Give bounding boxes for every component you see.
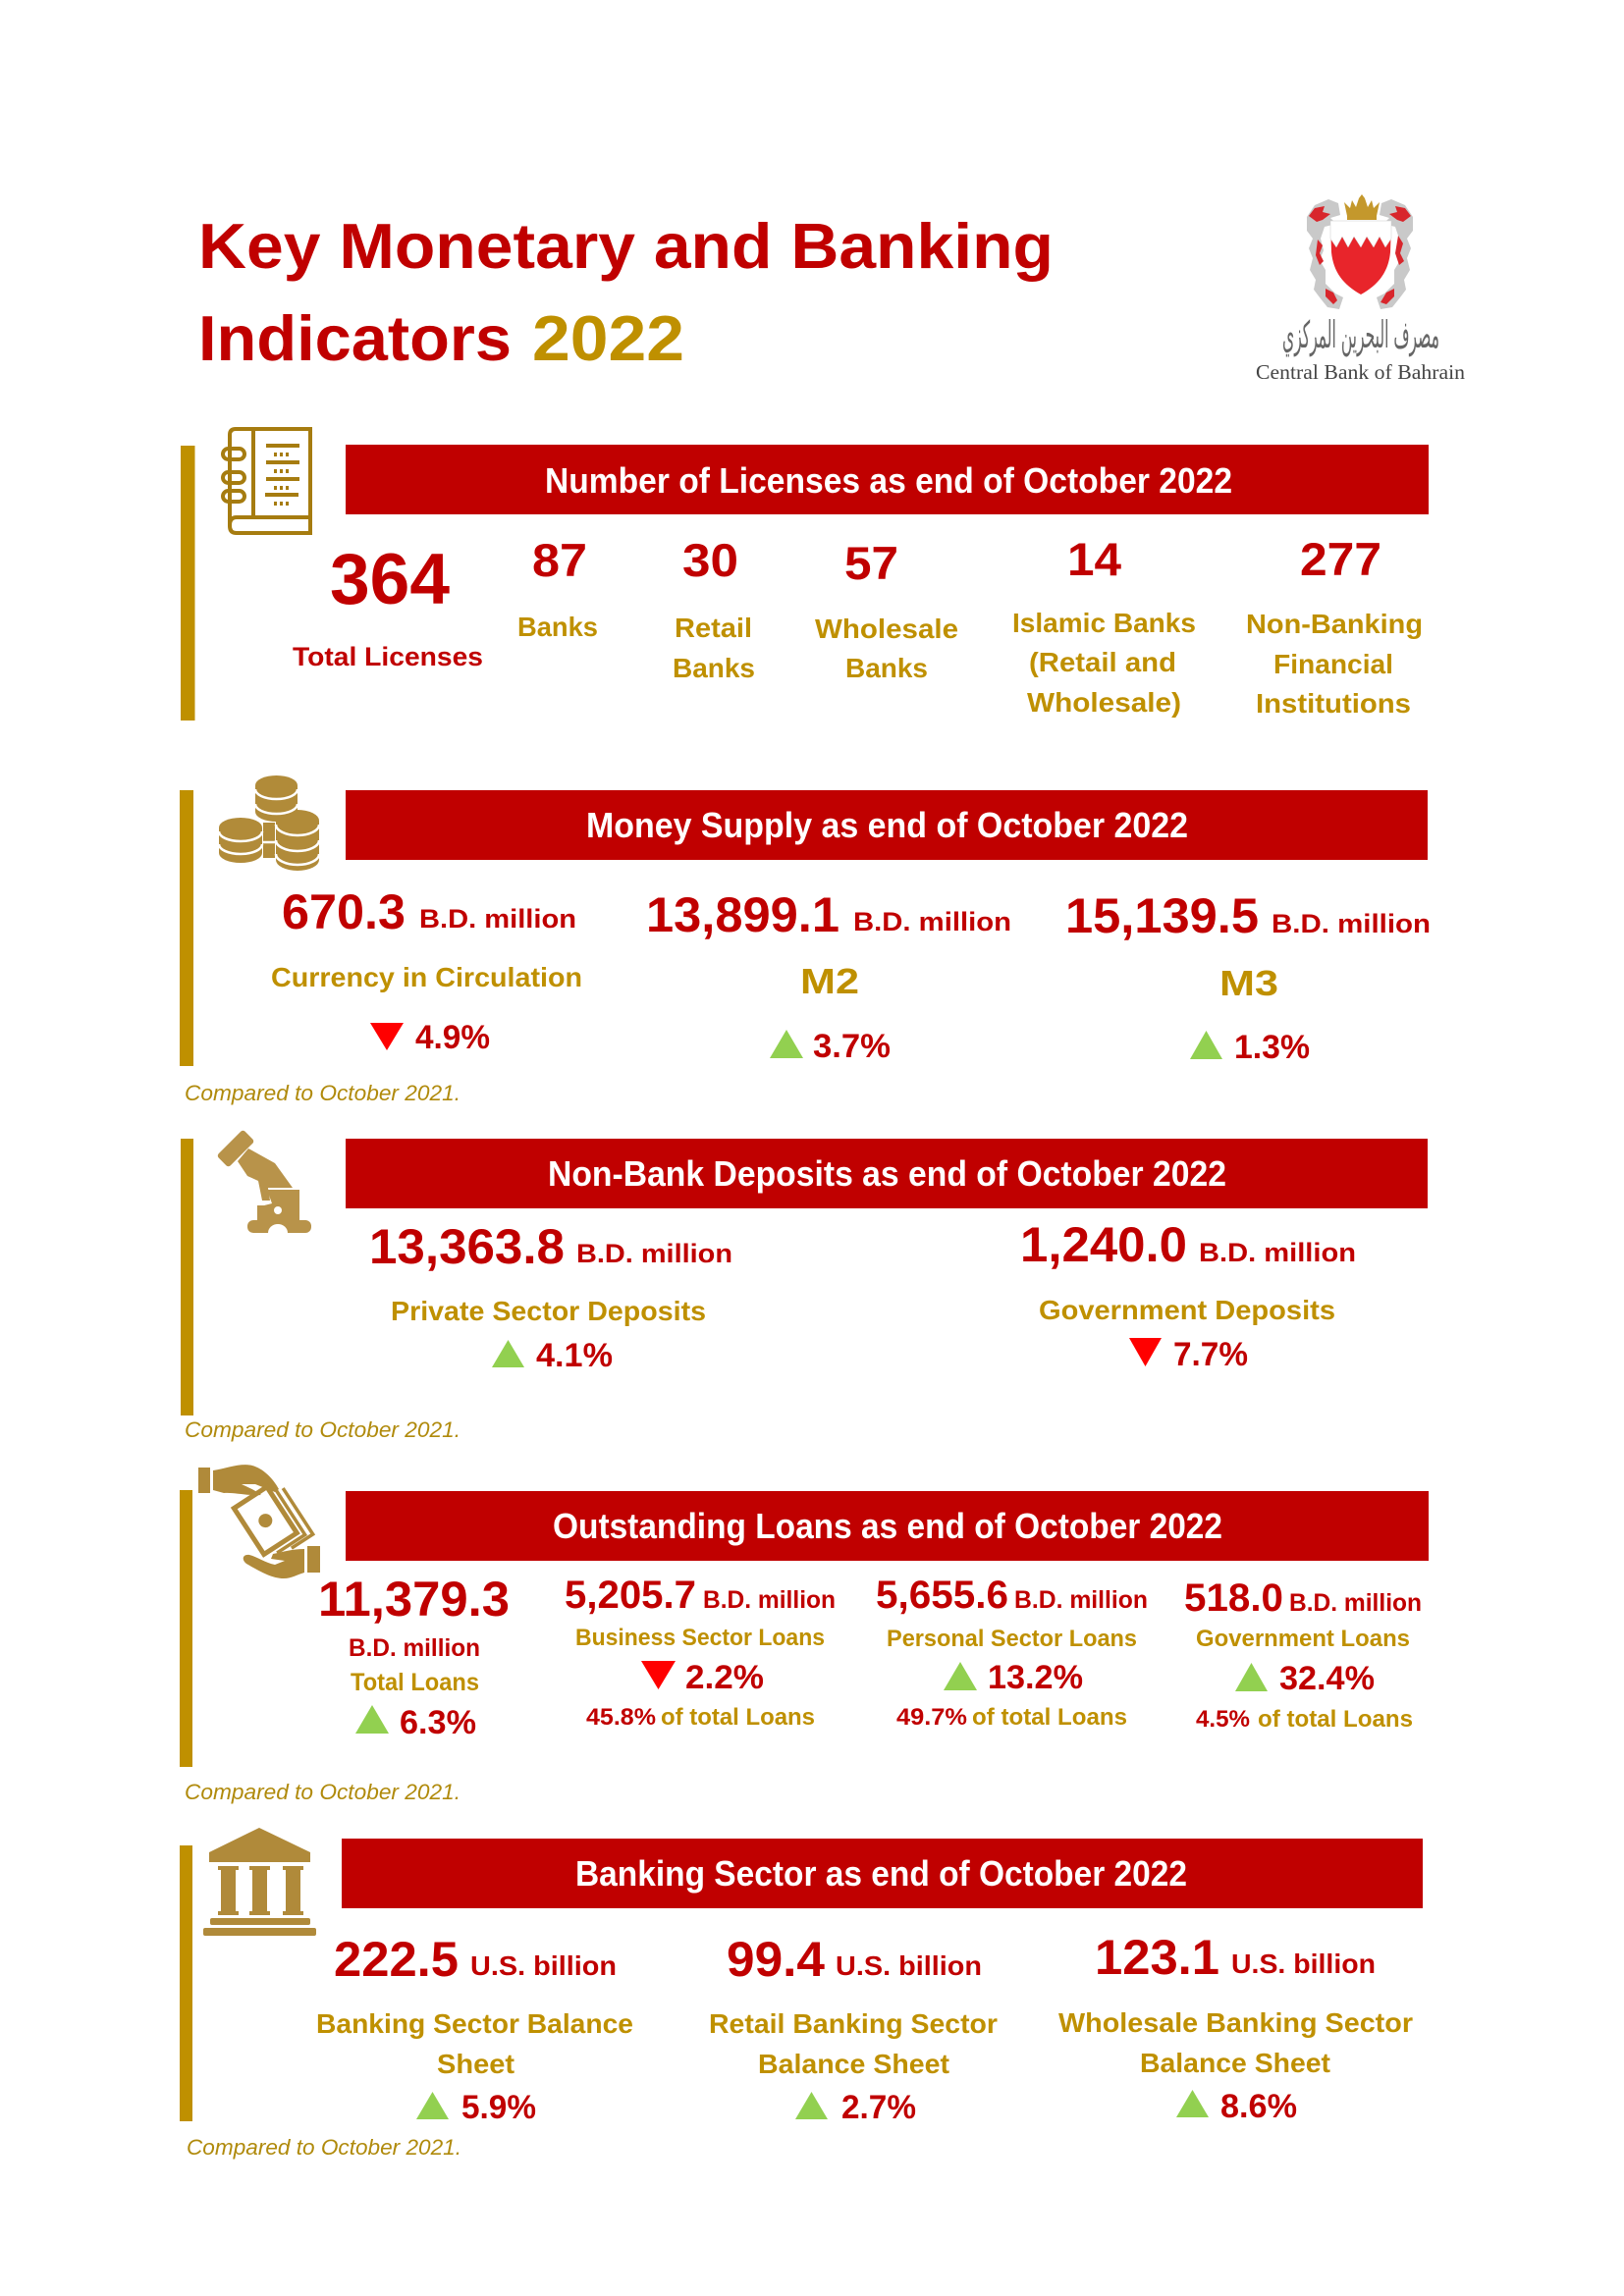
stat: total loans: B.D. million	[349, 1634, 480, 1662]
stat: government deposits: B.D. million	[1199, 1238, 1356, 1267]
title: Key Monetary and Banking	[198, 210, 1054, 282]
stat: islamic banks: (Retail and	[1029, 647, 1176, 677]
stat: private sector deposits: 13,363.8	[369, 1219, 565, 1274]
stat: business sector loans: B.D. million	[703, 1586, 836, 1614]
stat: business sector loans: 2.2%	[685, 1659, 764, 1696]
panel: outstanding loans	[180, 1465, 1429, 1804]
heading	[346, 1491, 1429, 1561]
panel: non-bank deposits	[181, 1130, 1428, 1442]
stat: M2: M2	[800, 961, 859, 1001]
stat: total licenses: Total Licenses	[293, 642, 483, 671]
stat: government loans: B.D. million	[1289, 1589, 1422, 1617]
stat: M3	[1065, 888, 1431, 1066]
accent bar	[181, 1139, 193, 1415]
stat: banks	[517, 534, 598, 642]
stat: total loans	[318, 1572, 510, 1741]
heading: Money Supply as end of October 2022	[586, 805, 1188, 845]
logo: Central Bank of Bahrain	[1256, 194, 1466, 384]
title: Indicators	[198, 302, 512, 374]
stat: total loans: 11,379.3	[318, 1572, 510, 1627]
stat: government loans	[1184, 1576, 1422, 1733]
stat: banking sector balance sheet: U.S. billion	[470, 1950, 617, 1981]
stat: personal sector loans	[876, 1574, 1148, 1731]
stat: non-banking institutions: Financial	[1273, 649, 1393, 679]
heading	[346, 1139, 1428, 1208]
stat: business sector loans: Business Sector Loans	[575, 1625, 825, 1651]
stat: retail banking sector balance sheet: U.S. billion	[836, 1950, 982, 1981]
panel: banking sector	[180, 1828, 1423, 2160]
stat: government loans: 32.4%	[1279, 1660, 1375, 1697]
icon: crown	[1344, 194, 1380, 220]
stat: government loans: of total Loans	[1258, 1706, 1413, 1733]
stat: government loans: Government Loans	[1196, 1626, 1410, 1652]
logo caption: Central Bank of Bahrain	[1256, 360, 1466, 384]
stat: wholesale banking sector balance sheet: Balance Sheet	[1140, 2048, 1330, 2078]
stat: retail banking sector balance sheet: 99.4	[727, 1932, 825, 1987]
stat: government deposits	[1020, 1217, 1356, 1373]
stat: currency in circulation: 4.9%	[415, 1019, 490, 1056]
stat: M2: B.D. million	[853, 907, 1011, 936]
stat: banking sector balance sheet	[316, 1932, 633, 2126]
title	[198, 210, 1054, 374]
heading: Non-Bank Deposits as end of October 2022	[548, 1153, 1226, 1194]
title: 2022	[532, 302, 684, 374]
panel: number of licenses	[181, 429, 1429, 721]
stat: non-banking institutions: Non-Banking	[1246, 609, 1423, 639]
stat: currency in circulation: Currency in Circulation	[271, 962, 582, 992]
stat: banks: 87	[532, 534, 587, 586]
stat: wholesale banking sector balance sheet: U.S. billion	[1231, 1949, 1376, 1979]
stat: currency in circulation	[271, 884, 582, 1056]
stat: M2: 3.7%	[813, 1028, 891, 1065]
icon: hand depositing money	[217, 1130, 311, 1233]
stat: retail banking sector balance sheet: 2.7%	[841, 2089, 916, 2126]
accent bar	[180, 1845, 192, 2121]
footnote: Compared to October 2021.	[187, 2135, 461, 2160]
stat: banking sector balance sheet: 222.5	[334, 1932, 459, 1987]
stat: government deposits: 7.7%	[1173, 1336, 1248, 1373]
icon: bank building	[203, 1828, 316, 1936]
footnote: Compared to October 2021.	[185, 1417, 460, 1442]
footnote: Compared to October 2021.	[185, 1081, 460, 1105]
icon: shield	[1330, 221, 1391, 294]
stat: wholesale banking sector balance sheet: Wholesale Banking Sector	[1058, 2007, 1413, 2038]
stat: islamic banks: Wholesale)	[1027, 687, 1181, 718]
stat: retail banks: Retail	[675, 613, 752, 643]
accent bar	[181, 446, 194, 721]
stat: business sector loans: of total Loans	[661, 1704, 815, 1731]
stat: wholesale banks: 57	[844, 537, 898, 589]
stat: personal sector loans: Personal Sector Loans	[887, 1626, 1137, 1652]
stat: business sector loans: 45.8%	[586, 1704, 656, 1731]
stat: banking sector balance sheet: Banking Sector Balance	[316, 2008, 633, 2039]
stat: non-banking institutions	[1246, 533, 1423, 719]
stat: islamic banks: 14	[1067, 533, 1121, 585]
stat: currency in circulation: B.D. million	[419, 904, 576, 934]
heading	[346, 445, 1429, 514]
stat: M3: M3	[1219, 963, 1278, 1003]
stat: total licenses: 364	[330, 540, 450, 619]
stat: retail banks: 30	[682, 534, 738, 586]
accent bar	[180, 1490, 192, 1767]
icon: notebook	[223, 429, 310, 533]
stat: private sector deposits	[369, 1219, 732, 1374]
stat: islamic banks: Islamic Banks	[1012, 608, 1196, 638]
stat: private sector deposits: Private Sector Deposits	[391, 1296, 706, 1326]
stat: wholesale banks: Banks	[845, 653, 928, 683]
stat: wholesale banking sector balance sheet	[1058, 1930, 1413, 2125]
panel: money supply	[180, 775, 1431, 1105]
stat: total licenses	[293, 540, 483, 671]
stat: wholesale banks: Wholesale	[815, 614, 958, 644]
stat: government deposits: 1,240.0	[1020, 1217, 1187, 1272]
stat: private sector deposits: B.D. million	[576, 1239, 732, 1268]
stat: total loans: Total Loans	[351, 1669, 479, 1696]
stat: wholesale banking sector balance sheet: 8.6%	[1220, 2088, 1297, 2125]
stat: wholesale banks	[815, 537, 958, 683]
stat: government deposits: Government Deposits	[1039, 1295, 1335, 1325]
stat: retail banks	[673, 534, 755, 683]
stat: retail banking sector balance sheet	[709, 1932, 998, 2126]
stat: islamic banks	[1012, 533, 1196, 718]
stat: personal sector loans: 5,655.6	[876, 1574, 1008, 1617]
stat: personal sector loans: 49.7%	[896, 1704, 967, 1731]
stat: government loans: 4.5%	[1196, 1706, 1250, 1733]
footnote: Compared to October 2021.	[185, 1780, 460, 1804]
heading	[346, 790, 1428, 860]
stat: M2	[646, 887, 1011, 1065]
stat: business sector loans	[565, 1574, 836, 1731]
heading: Outstanding Loans as end of October 2022	[553, 1506, 1222, 1546]
stat: retail banking sector balance sheet: Balance Sheet	[758, 2049, 949, 2079]
icon: coins	[219, 775, 319, 871]
stat: government loans: 518.0	[1184, 1576, 1283, 1620]
stat: private sector deposits: 4.1%	[536, 1337, 613, 1374]
stat: M3: 15,139.5	[1065, 888, 1259, 943]
stat: retail banks: Banks	[673, 653, 755, 683]
stat: business sector loans: 5,205.7	[565, 1574, 696, 1617]
heading	[342, 1839, 1423, 1908]
heading: Number of Licenses as end of October 2022	[545, 460, 1232, 501]
stat: wholesale banking sector balance sheet: 123.1	[1095, 1930, 1219, 1985]
stat: retail banking sector balance sheet: Retail Banking Sector	[709, 2008, 998, 2039]
stat: currency in circulation: 670.3	[282, 884, 406, 939]
stat: personal sector loans: of total Loans	[972, 1704, 1127, 1731]
stat: M3: B.D. million	[1272, 909, 1431, 938]
stat: M2: 13,899.1	[646, 887, 839, 942]
icon: mantling	[1307, 199, 1413, 309]
stat: personal sector loans: 13.2%	[988, 1659, 1083, 1696]
heading: Banking Sector as end of October 2022	[575, 1853, 1187, 1894]
stat: personal sector loans: B.D. million	[1014, 1586, 1148, 1614]
icon: hands exchanging money	[198, 1465, 320, 1578]
stat: M3: 1.3%	[1234, 1029, 1310, 1066]
accent bar	[180, 790, 193, 1066]
stat: banking sector balance sheet: Sheet	[437, 2049, 514, 2079]
stat: non-banking institutions: Institutions	[1256, 688, 1411, 719]
stat: banks: Banks	[517, 612, 598, 642]
stat: total loans: 6.3%	[400, 1704, 476, 1741]
stat: banking sector balance sheet: 5.9%	[461, 2089, 536, 2126]
stat: non-banking institutions: 277	[1300, 533, 1381, 585]
